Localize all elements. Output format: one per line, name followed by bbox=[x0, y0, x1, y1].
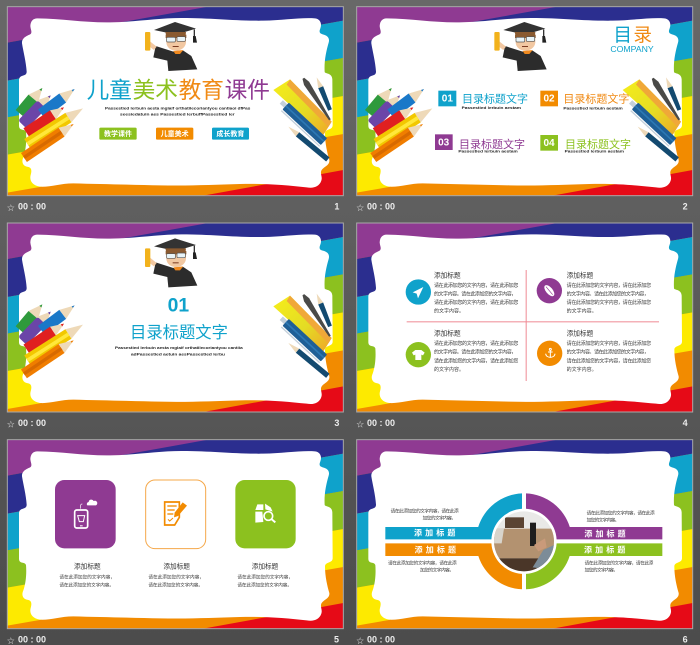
text block: bottom right: 添加标题 bbox=[567, 328, 594, 337]
slide 4 frame and rainbow background bbox=[357, 223, 693, 412]
item 01: Passestied lerbuin aestam bbox=[462, 106, 522, 110]
text block: bottom left: 请在此添加您的文字内容，请在此添加您 bbox=[434, 340, 518, 347]
item 04: 目录标题文字 bbox=[565, 137, 631, 151]
slide 5 footer: 5 bbox=[334, 635, 339, 645]
slide 2 footer: 00 : 00 bbox=[367, 202, 395, 212]
caption 2 bbox=[148, 562, 204, 588]
icon: shopping phone bbox=[75, 500, 97, 528]
quadrant divider lines bbox=[407, 270, 659, 381]
slide 4 footer bbox=[356, 418, 688, 430]
segment: green bbox=[526, 543, 662, 589]
center photo bbox=[493, 510, 555, 573]
item 01: 01 bbox=[442, 94, 453, 105]
card: purple phone bbox=[55, 480, 116, 548]
item 01 bbox=[438, 91, 528, 110]
cover title: 课件 bbox=[225, 77, 270, 103]
slide 3 frame and rainbow background bbox=[7, 223, 343, 412]
ruler and pens illustration bbox=[273, 293, 332, 378]
text block: bottom left: 的文字内容。 bbox=[434, 366, 464, 373]
text: top left bbox=[391, 507, 459, 522]
text block: top left: 添加标题 bbox=[434, 270, 461, 279]
slide 5 frame and rainbow background bbox=[7, 440, 343, 629]
slide 6: circular diagram bbox=[356, 440, 693, 645]
text block: top left: 的文字内容。 bbox=[434, 307, 464, 314]
item 03: 目录标题文字 bbox=[459, 137, 525, 151]
tag: 教学课件: 教学课件 bbox=[104, 129, 132, 138]
text: top left: 请在此添加您的文字内容，请在此添 bbox=[391, 507, 459, 514]
slide 3 footer bbox=[7, 418, 339, 430]
icon: anchor bbox=[537, 341, 562, 366]
cover title: 儿童 bbox=[87, 77, 132, 103]
cover title: 美术 bbox=[133, 77, 178, 103]
segment: orange bbox=[385, 543, 522, 589]
slide 4 footer: 4 bbox=[683, 418, 688, 428]
caption 2: 请在此添加您的文字内容。 bbox=[148, 581, 203, 588]
ruler and pens illustration bbox=[623, 76, 682, 162]
slide 1 footer bbox=[7, 202, 339, 214]
caption 1: 请在此添加您的文字内容， bbox=[59, 574, 115, 581]
item 02: 02 bbox=[543, 94, 555, 105]
tag: 教学课件 bbox=[99, 128, 137, 140]
text: top right bbox=[587, 510, 655, 524]
slide 1: cover bbox=[7, 7, 343, 214]
text: top left: 加您的文字内容。 bbox=[423, 515, 456, 522]
item 02 bbox=[540, 91, 629, 111]
graduate character bbox=[145, 22, 197, 71]
item 01: 目录标题文字 bbox=[462, 92, 528, 106]
bar label: cyan: 添加标题 bbox=[414, 528, 455, 538]
card: green map search bbox=[235, 480, 296, 548]
slide 3 footer: 3 bbox=[334, 418, 339, 428]
pencils illustration bbox=[16, 300, 86, 378]
text block: top right: 请在此添加您的文字内容，请在此添加您 bbox=[567, 282, 651, 289]
bar label: orange: 添加标题 bbox=[415, 544, 456, 554]
slide 3: section title bbox=[7, 223, 343, 430]
item 02: 目录标题文字 bbox=[563, 92, 629, 106]
text: bottom right bbox=[585, 559, 654, 574]
text block: top left: 请在此添加您的文字内容，请在此添加您 bbox=[434, 299, 518, 306]
item 04: 04 bbox=[543, 138, 555, 149]
slide 5 footer bbox=[7, 635, 339, 645]
item 02: Passestied lerbuin aestam bbox=[563, 107, 624, 111]
cover subtitle: Passestied lerbuin aesta mglaif orthatilecoriantyou cantiaoi dfPas bbox=[105, 107, 250, 111]
text: top right: 请在此添加您的文字内容，请在此添 bbox=[587, 510, 655, 517]
item 04: Passestied lerbuin aestam bbox=[565, 150, 625, 154]
tag: 成长教育 bbox=[212, 128, 249, 140]
pencils illustration bbox=[365, 84, 435, 162]
caption 3: 请在此添加您的文字内容。 bbox=[237, 581, 292, 588]
ruler and pens illustration bbox=[273, 76, 332, 162]
text: bottom right: 加您的文字内容。 bbox=[585, 567, 618, 574]
icon: paper plane bbox=[406, 279, 431, 305]
slide 4: four quadrants bbox=[356, 223, 693, 430]
text: bottom left: 请在此添加您的文字内容，请在此添 bbox=[388, 559, 457, 566]
slide 1 footer: ☆ bbox=[7, 203, 15, 214]
slide 1 footer: 1 bbox=[334, 202, 339, 212]
text block: top left: 的文字内容。请在此添加您的文字内容， bbox=[434, 290, 516, 297]
text block: bottom left: 请在此添加您的文字内容，请在此添加您 bbox=[434, 357, 518, 364]
item 03: 03 bbox=[438, 137, 450, 148]
slide 2 footer bbox=[356, 202, 688, 214]
tag: 儿童美术 bbox=[156, 128, 193, 140]
slide 2 footer: ☆ bbox=[356, 203, 364, 214]
text block: bottom left: 添加标题 bbox=[434, 328, 461, 337]
caption 1 bbox=[59, 562, 115, 588]
text block: top right bbox=[567, 270, 651, 314]
contents heading bbox=[610, 25, 654, 54]
graduate character bbox=[145, 238, 197, 287]
text block: top right: 的文字内容。请在此添加您的文字内容， bbox=[567, 290, 649, 297]
tag: 成长教育: 成长教育 bbox=[216, 129, 244, 138]
icon: t-shirt bbox=[406, 342, 431, 367]
text block: bottom left bbox=[434, 328, 518, 373]
slide 6 frame and rainbow background bbox=[357, 440, 693, 629]
text: top right: 加您的文字内容。 bbox=[587, 517, 619, 524]
segment: purple bbox=[526, 493, 662, 539]
card: outlined document bbox=[146, 480, 206, 549]
contents heading: 录 bbox=[633, 25, 652, 46]
text: bottom right: 请在此添加您的文字内容，请在此添 bbox=[585, 559, 654, 566]
icon: document and pencil bbox=[165, 502, 187, 525]
text block: top left bbox=[434, 270, 518, 314]
tag: 儿童美术: 儿童美术 bbox=[161, 129, 189, 138]
caption 3: 添加标题 bbox=[252, 562, 279, 571]
graduate character bbox=[494, 22, 547, 71]
text block: top right: 的文字内容。 bbox=[567, 307, 597, 314]
text block: bottom right: 请在此添加您的文字内容，请在此添加您 bbox=[567, 340, 651, 347]
text block: top right: 请在此添加您的文字内容，请在此添加您 bbox=[567, 299, 651, 306]
section title: 目录标题文字 bbox=[130, 324, 228, 342]
text block: bottom right bbox=[567, 328, 651, 373]
slide 2: contents bbox=[356, 7, 693, 214]
slide 6 footer: 6 bbox=[683, 635, 688, 645]
slide 4 footer: ☆ bbox=[356, 419, 364, 430]
item 03 bbox=[435, 134, 525, 154]
slide 1 footer: 00 : 00 bbox=[18, 202, 46, 212]
caption 1: 请在此添加您的文字内容。 bbox=[59, 581, 114, 588]
bar label: green: 添加标题 bbox=[584, 544, 625, 554]
cover subtitle: seesiedatuin aes Passestied lerbuffPassestied ler bbox=[120, 113, 235, 117]
icon: map and magnifier bbox=[255, 504, 275, 523]
slide 3 footer: ☆ bbox=[7, 419, 15, 430]
slide 6 footer bbox=[356, 635, 688, 645]
slide 4 footer: 00 : 00 bbox=[367, 418, 395, 428]
text block: bottom right: 请在此添加您的文字内容，请在此添加您 bbox=[567, 357, 651, 364]
contents heading: COMPANY bbox=[610, 44, 654, 54]
slide 5: three icon cards bbox=[7, 440, 343, 645]
segment: cyan bbox=[385, 493, 522, 539]
pencils illustration bbox=[16, 84, 86, 162]
text block: top left: 请在此添加您的文字内容，请在此添加您 bbox=[434, 282, 518, 289]
bar label: purple: 添加标题 bbox=[584, 528, 626, 538]
cover title: 教育 bbox=[179, 77, 224, 103]
slide 3 footer: 00 : 00 bbox=[18, 418, 46, 428]
slide 2 footer: 2 bbox=[683, 202, 688, 212]
contents heading: 目 bbox=[613, 25, 632, 46]
section number: 01 bbox=[168, 296, 189, 317]
caption 3 bbox=[237, 562, 293, 588]
caption 2: 请在此添加您的文字内容， bbox=[148, 574, 204, 581]
cover subtitle bbox=[105, 107, 250, 117]
text: bottom left bbox=[388, 559, 457, 574]
section description bbox=[115, 346, 244, 356]
text block: top right: 添加标题 bbox=[567, 270, 594, 279]
item 03: Passestied lerbuin aestam bbox=[458, 150, 519, 154]
text: bottom left: 加您的文字内容。 bbox=[420, 567, 454, 574]
text block: bottom left: 的文字内容。请在此添加您的文字内容， bbox=[434, 349, 516, 356]
text block: bottom right: 的文字内容。请在此添加您的文字内容， bbox=[567, 349, 649, 356]
caption 3: 请在此添加您的文字内容， bbox=[237, 574, 293, 581]
slide 5 footer: 00 : 00 bbox=[18, 635, 46, 645]
text block: bottom right: 的文字内容。 bbox=[567, 366, 597, 373]
item 04 bbox=[540, 135, 631, 154]
caption 2: 添加标题 bbox=[163, 562, 190, 571]
slide 2 frame and rainbow background bbox=[357, 7, 693, 196]
icon: leaf bbox=[537, 278, 562, 303]
section description: Passestied lerbuin aesta mglaif orthatilecoriantyou cantiia bbox=[115, 346, 244, 350]
slide 1 frame and rainbow background bbox=[7, 7, 343, 196]
slide 6 footer: 00 : 00 bbox=[367, 635, 395, 645]
section description: adPassestied aetuin aesPassestied lerbu bbox=[131, 352, 225, 356]
caption 1: 添加标题 bbox=[74, 562, 101, 571]
